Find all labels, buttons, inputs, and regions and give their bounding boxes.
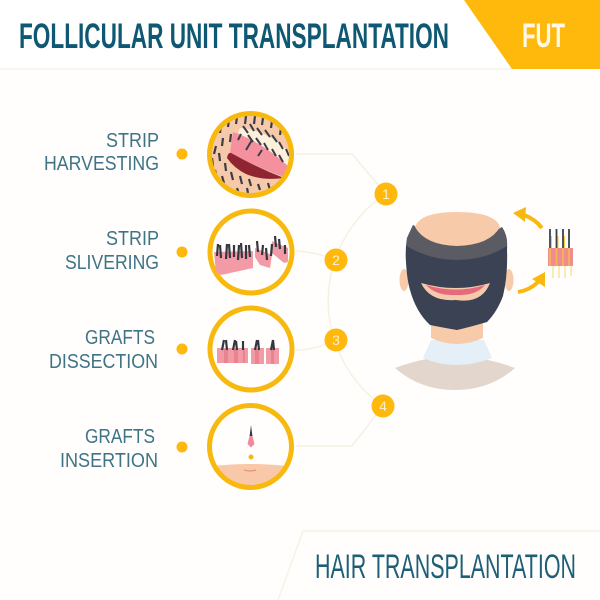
- label: grafts insertion: [60, 426, 188, 472]
- label: strip harvesting: STRIP: [106, 130, 159, 152]
- label: strip slivering: STRIP: [106, 228, 159, 250]
- marker 4: 4: [379, 398, 387, 414]
- marker 1: [374, 182, 398, 206]
- marker 3: 3: [332, 332, 340, 348]
- marker 1: 1: [382, 186, 390, 202]
- marker 2: [324, 248, 348, 272]
- badge: FUT: FUT: [522, 17, 565, 55]
- label: strip harvesting: [44, 130, 188, 175]
- icon: strip harvesting: [209, 114, 292, 196]
- marker 3: [324, 328, 348, 352]
- icon: strip slivering: [210, 211, 292, 293]
- marker 2: 2: [332, 252, 340, 268]
- marker 4: [372, 394, 394, 418]
- label: grafts dissection: [49, 327, 188, 373]
- label: grafts insertion: INSERTION: [60, 450, 158, 472]
- icon: grafts insertion: [205, 406, 296, 495]
- label: strip slivering: SLIVERING: [65, 252, 159, 274]
- arrow: graft to recipient area: [513, 207, 542, 228]
- label: strip harvesting: HARVESTING: [44, 153, 159, 175]
- icon: grafts dissection: [210, 308, 292, 390]
- label: strip slivering: [65, 228, 188, 274]
- label: grafts dissection: GRAFTS: [85, 327, 155, 349]
- label: grafts dissection: DISSECTION: [49, 351, 158, 373]
- connector network: [296, 154, 386, 446]
- label: grafts insertion: GRAFTS: [85, 426, 155, 448]
- arrow: donor area to graft: [518, 272, 545, 292]
- illustration: head with donor strip scar: [395, 212, 515, 390]
- badge: FUT: [464, 0, 600, 69]
- icon: extracted grafts: [548, 229, 573, 278]
